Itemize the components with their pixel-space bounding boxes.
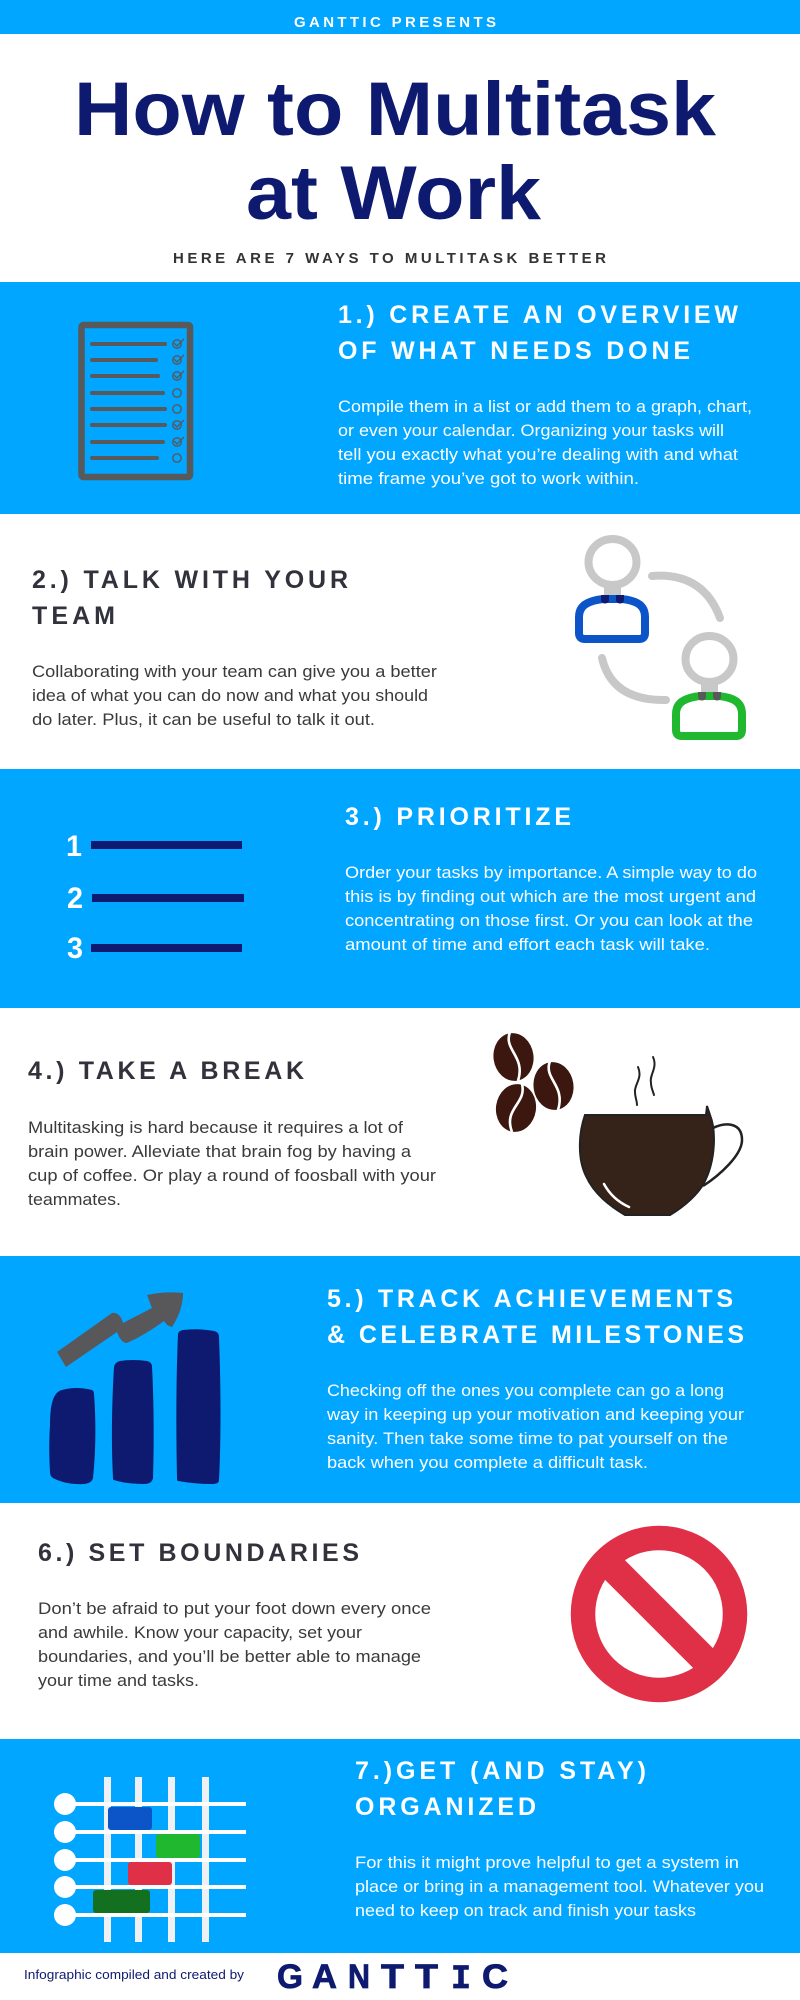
text: step 3 body: this is by finding out which are the most urgent and [345,887,756,906]
heading: step 2: 2.) TALK WITH YOUR [32,566,348,594]
heading: step 5: 5.) TRACK ACHIEVEMENTS [327,1285,733,1313]
heading: step 1: OF WHAT NEEDS DONE [338,337,690,365]
text: step 1 body [338,397,752,488]
text: step 6 body: boundaries, and you’ll be better able to manage [38,1647,421,1666]
logo: gantTic wordmark [277,1958,508,1999]
text: step 5 body: back when you complete a difficult task. [327,1453,648,1472]
icon: numbered priority list [66,830,244,965]
text: step 5 body: Checking off the ones you complete can go a long [327,1381,724,1400]
heading: step 7: 7.)GET (AND STAY) [355,1757,646,1785]
heading: step 5: & CELEBRATE MILESTONES [327,1321,744,1349]
text: step 4 body: cup of coffee. Or play a round of foosball with your [28,1166,436,1185]
text: step 7 body: place or bring in a management tool. Whatever you [355,1877,764,1896]
heading: step 2: TEAM [32,602,115,630]
text: step 2 body [32,662,437,729]
icon: numbered priority list: 2 [67,882,83,915]
icon: numbered priority list: 1 [66,830,82,863]
panel: step 2 talk with your team [0,514,800,769]
text: step 3 body: Order your tasks by importance. A simple way to do [345,863,757,882]
logo: gantTic wordmark: C [482,1958,508,1996]
logo: gantTic wordmark: T [381,1958,404,1996]
text: step 3 body: amount of time and effort each task will take. [345,935,710,954]
panel: step 3 prioritize [0,769,800,1008]
title: at Work [246,151,542,236]
title: How to Multitask [74,67,717,152]
text: step 2 body: idea of what you can do now and what you should [32,686,428,705]
logo: gantTic wordmark: A [312,1958,337,1996]
panel: step 4 take a break [0,1008,800,1256]
text: step 4 body [28,1118,436,1209]
text: step 6 body: Don’t be afraid to put your foot down every once [38,1599,431,1618]
panel: step 1 create an overview [0,282,800,514]
text: step 1 body: Compile them in a list or add them to a graph, chart, [338,397,752,416]
heading: step 5 [327,1285,744,1349]
text: step 2 body: Collaborating with your team can give you a better [32,662,437,681]
text: step 2 body: do later. Plus, it can be useful to talk it out. [32,710,375,729]
heading: step 4: 4.) TAKE A BREAK [28,1057,304,1085]
icon: checklist [82,325,190,477]
logo: gantTic wordmark: G [277,1958,303,1996]
panel: step 5 track achievements [0,1256,800,1503]
icon: two people collaborating [579,539,742,736]
logo: gantTic wordmark: T [415,1958,438,1996]
top banner [0,0,800,34]
panel: step 6 set boundaries [0,1503,800,1739]
footer credit: Infographic compiled and created by [24,1967,245,1982]
heading: step 7 [355,1757,646,1821]
text: step 5 body: way in keeping up your motivation and keeping your [326,1405,744,1424]
text: step 7 body: For this it might prove helpful to get a system in [355,1853,739,1872]
text: step 5 body: sanity. Then take some time to pat yourself on the [327,1429,728,1448]
text: step 1 body: or even your calendar. Organizing your tasks will [338,421,724,440]
text: step 7 body: need to keep on track and finish your tasks [355,1901,696,1920]
text: step 6 body: and awhile. Know your capacity, set your [38,1623,362,1642]
icon: gantt chart [54,1777,246,1942]
text: step 4 body: Multitasking is hard because it requires a lot of [28,1118,403,1137]
top banner: GANTTIC PRESENTS [294,14,496,31]
title [74,67,717,236]
heading: step 7: ORGANIZED [355,1793,536,1821]
text: step 3 body [345,863,757,954]
heading: step 6: 6.) SET BOUNDARIES [38,1539,359,1567]
logo: gantTic wordmark: I [451,1961,471,1999]
icon: coffee beans [490,1030,577,1135]
text: step 1 body: time frame you’ve got to work within. [338,469,639,488]
text: step 3 body: concentrating on those first. Or you can look at the [345,911,753,930]
subtitle: HERE ARE 7 WAYS TO MULTITASK BETTER [173,250,606,267]
text: step 6 body: your time and tasks. [38,1671,199,1690]
heading: step 1 [338,301,738,365]
icon: rising bar chart with arrow [49,1292,220,1484]
heading: step 3: 3.) PRIORITIZE [345,803,571,831]
text: step 4 body: teammates. [28,1190,121,1209]
text: step 4 body: brain power. Alleviate that brain fog by having a [28,1142,412,1161]
text: step 5 body [326,1381,744,1472]
logo: gantTic wordmark: N [348,1958,370,1996]
icon: prohibition sign [583,1538,735,1690]
heading: step 2 [32,566,348,630]
heading: step 1: 1.) CREATE AN OVERVIEW [338,301,738,329]
text: step 1 body: tell you exactly what you’re dealing with and what [338,445,738,464]
panel: step 7 get and stay organized [0,1739,800,1953]
icon: coffee cup [580,1057,742,1215]
text: step 6 body [38,1599,431,1690]
text: step 7 body [355,1853,764,1920]
icon: numbered priority list: 3 [67,932,83,965]
